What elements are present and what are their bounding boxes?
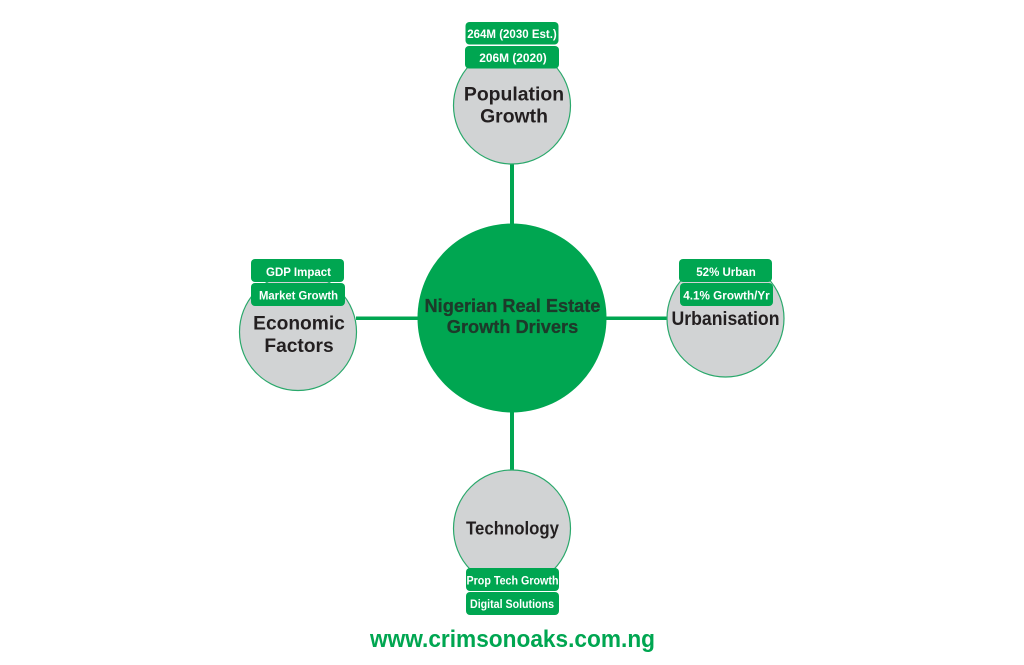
- panel: technology: [454, 470, 570, 615]
- pill: prop tech: Prop Tech Growth: [466, 576, 558, 588]
- connector: top: [510, 162, 514, 226]
- heading: economic factors: Economic: [253, 314, 345, 334]
- heading: population growth: Growth: [480, 106, 548, 128]
- pill: 206M: 206M (2020): [479, 51, 547, 65]
- pill: prop tech: [466, 568, 559, 591]
- connector: left: [356, 316, 420, 320]
- pill: 264M: [466, 22, 558, 44]
- panel: economic factors: [240, 259, 356, 390]
- hub title: Nigerian Real Estate: [425, 296, 600, 316]
- panel: population growth: [454, 22, 570, 164]
- heading: population growth: Population: [464, 84, 564, 106]
- heading: urbanisation: Urbanisation: [672, 308, 780, 330]
- hub title: Growth Drivers: [447, 317, 578, 337]
- heading: technology: Technology: [466, 518, 560, 538]
- website footer: www.crimsonoaks.com.ng: [369, 626, 655, 653]
- pill: 4.1% growth: 4.1% Growth/Yr: [683, 290, 770, 302]
- connector: right: [604, 316, 668, 320]
- pill: GDP impact: GDP Impact: [266, 267, 331, 279]
- pill: 206M: [465, 46, 559, 68]
- pill: digital solutions: Digital Solutions: [470, 599, 554, 611]
- pill: market growth: Market Growth: [259, 290, 338, 302]
- heading: economic factors: Factors: [264, 336, 334, 357]
- connector: bottom: [510, 410, 514, 472]
- pill: digital solutions: [466, 592, 559, 615]
- pill: 264M: 264M (2030 Est.): [467, 29, 557, 41]
- pill: 52% urban: 52% Urban: [696, 267, 756, 279]
- central hub: [418, 224, 606, 412]
- panel: urbanisation: [667, 259, 784, 377]
